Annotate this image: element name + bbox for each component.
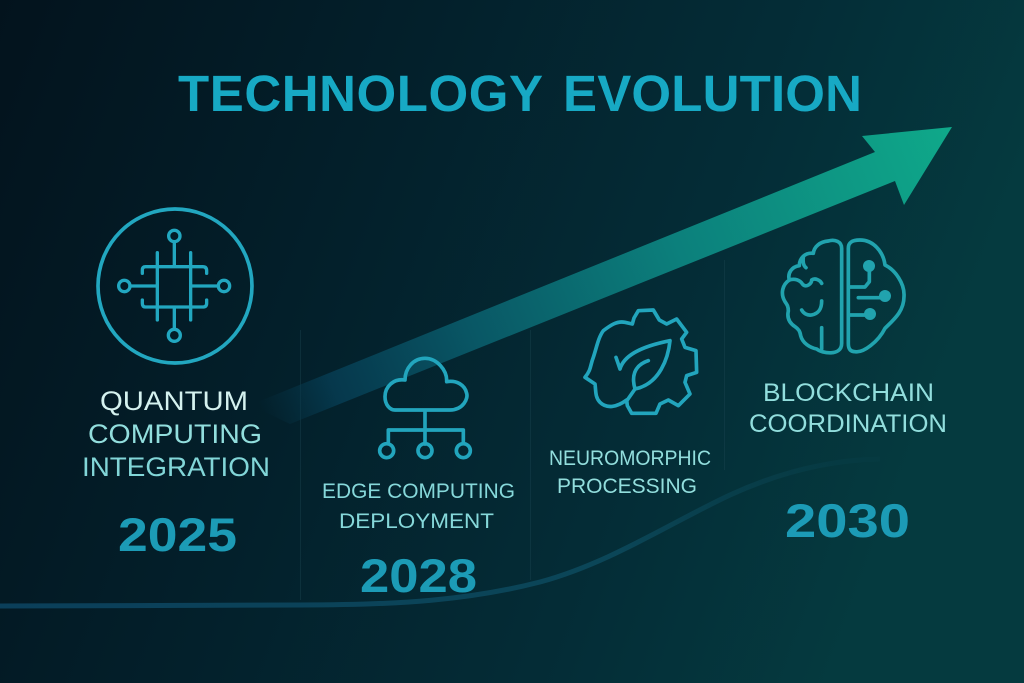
- growth arrow: [250, 127, 952, 424]
- title: TECHNOLOGY: [178, 65, 543, 122]
- label: blockchain coordination: [749, 379, 947, 438]
- label: neuromorphic processing: [549, 447, 711, 498]
- label: edge computing deployment: [322, 480, 515, 533]
- label: quantum computing integration: QUANTUM: [100, 386, 248, 416]
- label: edge computing deployment: EDGE COMPUTING: [322, 480, 515, 503]
- year 2030: 2030: [785, 494, 910, 547]
- icon: neuromorphic gear head with leaf: [585, 310, 697, 413]
- year 2028: 2028: [360, 549, 477, 602]
- growth curve: [0, 459, 880, 606]
- year 2025: 2025: [118, 508, 237, 561]
- title: [178, 65, 862, 122]
- title: EVOLUTION: [563, 65, 862, 122]
- label: blockchain coordination: COORDINATION: [749, 410, 947, 438]
- icon: cloud network: [380, 358, 470, 458]
- label: neuromorphic processing: NEUROMORPHIC: [549, 447, 711, 470]
- icon: quantum chip: [98, 209, 252, 363]
- label: neuromorphic processing: PROCESSING: [557, 475, 697, 498]
- label: blockchain coordination: BLOCKCHAIN: [763, 379, 934, 407]
- brain circuit nodes: [863, 260, 891, 320]
- label: quantum computing integration: INTEGRATION: [82, 452, 270, 482]
- label: quantum computing integration: COMPUTING: [88, 419, 262, 449]
- label: edge computing deployment: DEPLOYMENT: [339, 510, 494, 533]
- label: quantum computing integration: [82, 386, 270, 482]
- icon: brain with circuits: [782, 240, 904, 353]
